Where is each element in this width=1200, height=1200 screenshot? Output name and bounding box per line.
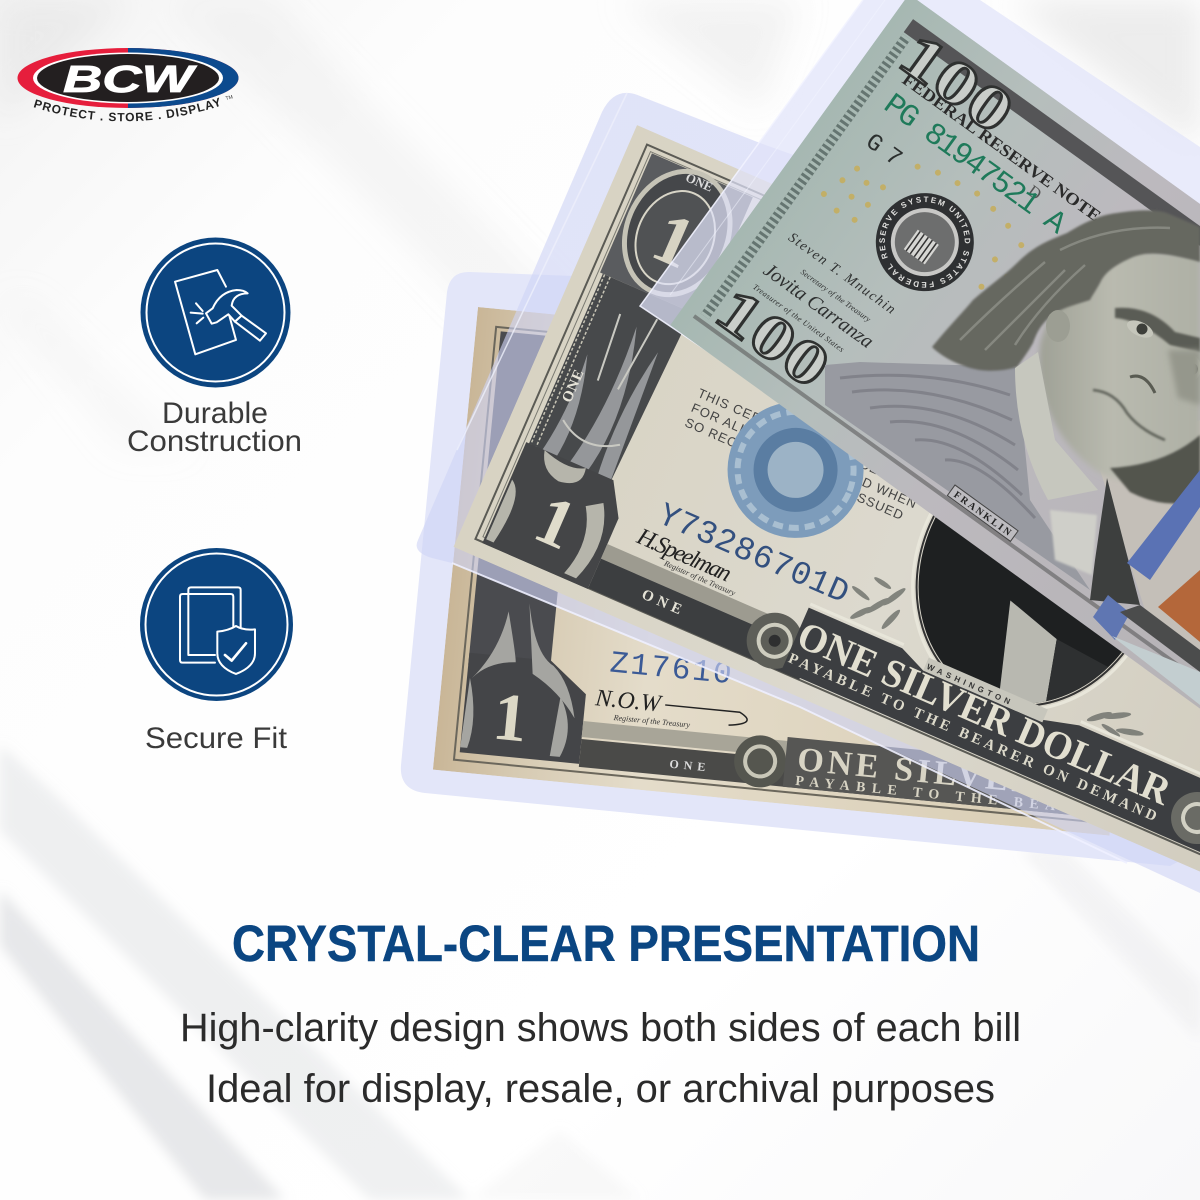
label Franklin: FRANKLIN: [951, 490, 1014, 539]
lower band: [601, 544, 800, 628]
sleeve: bottom: [401, 272, 1200, 866]
signatures: [753, 234, 894, 352]
label: Durable Construction: [127, 397, 302, 458]
logo: BCW: [18, 48, 238, 122]
dark column: [527, 274, 692, 487]
sleeve: top: [640, 0, 1200, 707]
bill: middle one silver dollar: ONE SILVER DOLLAR: [791, 612, 1179, 814]
inkwell: [1158, 570, 1200, 642]
one dollar column top oval: 1: [642, 197, 707, 284]
bill: middle one silver dollar: [453, 125, 1200, 878]
signatures: Treasurer of the United States: [751, 282, 846, 354]
bill: middle one silver dollar: Register of the Treasury: [662, 558, 737, 598]
serial: Y73286701D: [652, 497, 854, 612]
icon: durable construction: [140, 238, 290, 388]
bill: bottom one dollar: Register of the Treasury: [612, 713, 691, 729]
body text: High-clarity design shows both sides of each bill: [180, 1006, 1021, 1050]
brow and eyes: [1115, 308, 1200, 352]
bill: middle one silver dollar: WASHINGTON: [925, 662, 1012, 706]
label: Secure Fit: Secure Fit: [145, 722, 288, 755]
label: Durable Construction: Construction: [127, 425, 302, 458]
ear: [1046, 310, 1070, 342]
logo: BCW: BCW: [63, 59, 197, 101]
oval portrait: Washington: [850, 513, 1144, 737]
bill: bottom one dollar: PAYABLE TO THE BEARER: [795, 774, 1105, 819]
bill: middle one silver dollar: PAYABLE TO THE BEARER ON DEMAND: [786, 651, 1159, 825]
bill: bottom one dollar: Z17610: [608, 646, 733, 693]
heading: CRYSTAL-CLEAR PRESENTATION: [232, 915, 980, 972]
hundred dots: [820, 164, 1024, 290]
signatures: Steven T. Mnuchin: [785, 230, 898, 317]
icon: secure fit: [140, 548, 293, 701]
right background: [1102, 477, 1200, 650]
bill: bottom one dollar: 1: [490, 677, 531, 756]
certificate text: FOR ALL PUBLIC DUES AND WHEN: [689, 400, 920, 512]
lower band: [1120, 605, 1200, 672]
bill: top one hundred dollar: D: [1024, 181, 1045, 204]
100 numerals: 100: [887, 20, 1026, 147]
bill: top one hundred dollar: [670, 0, 1200, 708]
federal reserve note: FEDERAL RESERVE NOTE: [899, 70, 1104, 226]
signatures: Secretary of the Treasury: [799, 267, 873, 324]
bill: middle one silver dollar: H.Speelman: [632, 523, 735, 587]
bill: bottom one dollar: ONE: [669, 757, 706, 774]
certificate text: SO RECEIVED MAY BE REISSUED: [683, 415, 906, 523]
top border: [904, 19, 1200, 246]
logo: BCW: TM: [225, 94, 234, 102]
bill stack photo: [401, 0, 1200, 893]
nose and mouth: [1168, 350, 1200, 405]
one dollar column top oval: ONE: [683, 170, 715, 195]
certificate text: THIS CERTIFICATE IS RECEIVABLE: [695, 385, 928, 498]
one dollar column top oval: [600, 151, 754, 316]
body text: [180, 1006, 1021, 1111]
signatures: Jovita Carranza: [759, 259, 878, 353]
logo: BCW: PROTECT . STORE . DISPLAY: [34, 98, 220, 122]
collar: [1015, 352, 1098, 500]
hair: [932, 210, 1200, 371]
bill: middle one silver dollar: 1: [524, 481, 587, 565]
sleeve: middle: [417, 93, 1200, 893]
federal reserve seal: UNITED STATES FEDERAL RESERVE SYSTEM: [879, 196, 970, 288]
blue security ribbon: [1127, 470, 1200, 580]
serial number: PG 81947521 A: [876, 88, 1072, 243]
bill: middle one silver dollar: ONE: [639, 587, 684, 618]
bill: middle one silver dollar: ONE: [559, 368, 588, 405]
bill: top one hundred dollar: 100: [703, 275, 842, 402]
label: Durable Construction: Durable: [162, 397, 268, 430]
bill: bottom one dollar: [433, 307, 1155, 836]
bill: bottom one dollar: ONE SILVER: [796, 741, 1039, 801]
bill: bottom one dollar: N.O.W: [593, 685, 664, 718]
franklin portrait: [825, 210, 1200, 705]
bill: top one hundred dollar: G7: [860, 129, 907, 173]
face: [1039, 250, 1200, 481]
blue seal: [728, 404, 864, 538]
dark lettering band: [782, 608, 1200, 861]
body text: Ideal for display, resale, or archival purposes: [206, 1067, 995, 1111]
